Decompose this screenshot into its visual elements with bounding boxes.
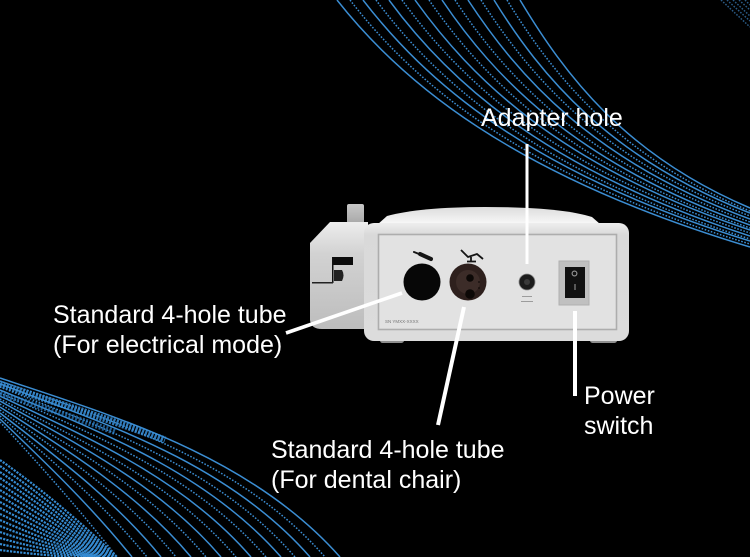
label: adapter hole: Adapter hole (481, 104, 623, 132)
label: dental chair tube: Standard 4-hole tube (271, 436, 505, 464)
device: rear panel (378, 234, 616, 330)
device: main body (364, 223, 629, 341)
leader line: electrical mode tube (286, 293, 402, 333)
label: dental chair tube: (For dental chair) (271, 466, 461, 494)
wave: bottom left fan (0, 378, 340, 557)
device: post (347, 204, 364, 226)
icon: handpiece (414, 252, 431, 259)
label: power switch: switch (584, 412, 653, 440)
device photo (310, 204, 629, 343)
leader line: power switch (573, 311, 577, 396)
label: power switch: Power (584, 382, 655, 410)
wave: top right (337, 0, 750, 247)
device: top dome (378, 207, 600, 224)
connector: adapter hole (519, 274, 535, 302)
serial label: SN YMXX-XXXX (385, 319, 419, 324)
icon: dental chair (461, 250, 483, 262)
label: electrical mode tube: Standard 4-hole tube (53, 301, 287, 329)
leader line: adapter hole (526, 144, 528, 264)
wave: bottom left dense corner (0, 460, 117, 557)
device: side module (310, 222, 368, 329)
label: electrical mode tube: (For electrical mode) (53, 331, 282, 359)
power switch (559, 261, 589, 305)
leader line: dental chair tube (438, 307, 464, 425)
wave: top right corner (721, 0, 750, 27)
connector: electrical mode socket (404, 264, 440, 300)
device: feet (380, 338, 617, 343)
connector: dental chair socket (450, 264, 486, 300)
